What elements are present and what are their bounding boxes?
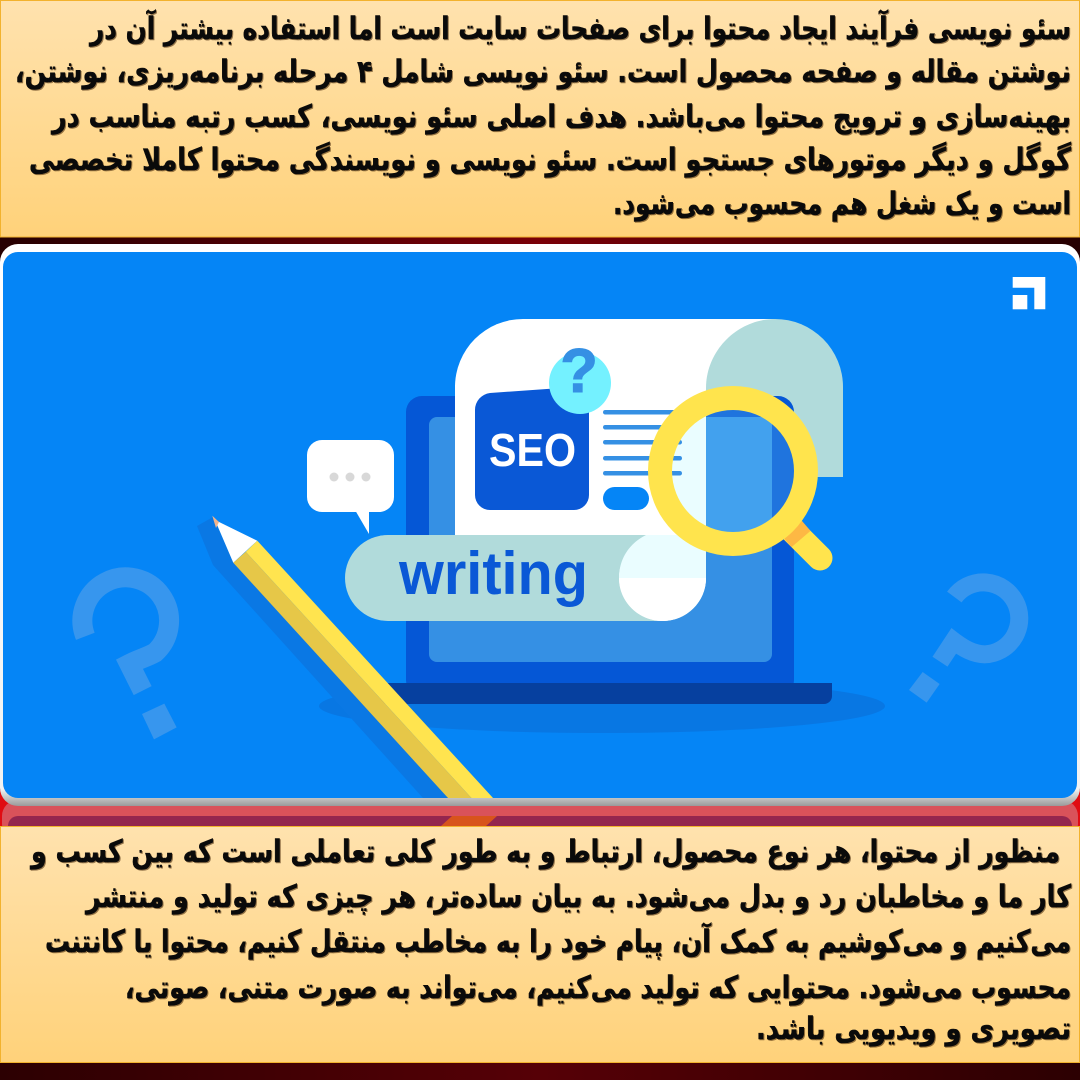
- paper sheet: [455, 385, 706, 536]
- SEO card: SEO: [489, 424, 576, 476]
- chat bubble: [307, 440, 394, 534]
- paper curl back: [455, 319, 774, 387]
- icon: faint question mark left: [82, 577, 177, 739]
- bottom paragraph text: [29, 834, 1072, 1047]
- laptop: [380, 396, 832, 704]
- panel: top text: [0, 0, 1080, 237]
- top paragraph text: [15, 9, 1072, 222]
- pencil shadow: [197, 517, 448, 798]
- panel: image frame: [0, 244, 1080, 806]
- illustration: [82, 277, 1045, 798]
- magnifier: [660, 398, 820, 558]
- writing scroll: [345, 535, 706, 621]
- reflection under image: [0, 790, 1080, 840]
- icon: logo: [1013, 277, 1045, 309]
- icon: question badge: ?: [560, 337, 598, 406]
- paper text lines: [603, 410, 683, 476]
- blue button: [603, 487, 649, 510]
- icon: question badge: [549, 348, 611, 414]
- writing scroll: writing: [398, 540, 588, 607]
- magnifier lens view: [672, 410, 794, 532]
- ground shadow: [319, 690, 885, 733]
- pencil: [212, 516, 493, 798]
- teal paper fold: [706, 319, 843, 477]
- icon: faint question mark right: [909, 582, 1019, 703]
- SEO card: [475, 386, 589, 510]
- panel: bottom text: [0, 826, 1080, 1062]
